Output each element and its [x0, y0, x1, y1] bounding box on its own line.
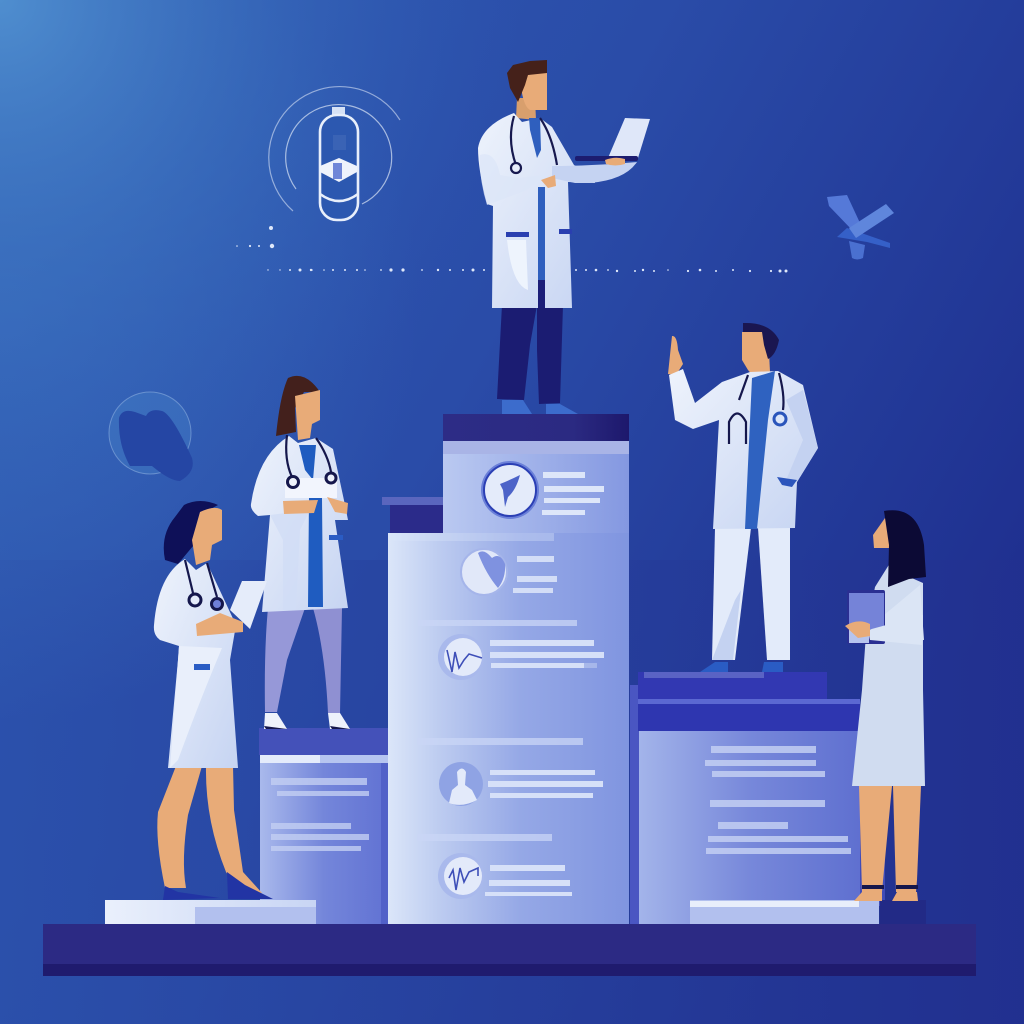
stethoscope: [286, 435, 336, 488]
ankle straps: [862, 885, 918, 889]
stethoscope: [729, 373, 786, 444]
figure: right woman with book: [845, 510, 926, 901]
dress: [852, 563, 925, 786]
figure: top doctor with laptop: [478, 60, 650, 414]
section rule 1: [418, 620, 577, 626]
hand: [845, 621, 870, 638]
text lines: row 3: [488, 770, 603, 798]
legs: [859, 786, 892, 892]
icon: oxygen cylinder: [269, 87, 400, 220]
face and neck: [192, 508, 222, 565]
section rule 3: [417, 834, 552, 841]
pockets: [506, 232, 529, 237]
laptop: [230, 581, 267, 629]
icon: heart badge: [461, 549, 507, 595]
step slab left: [105, 900, 316, 924]
right panel: [630, 672, 885, 924]
hair: [884, 510, 926, 587]
lab coat: [154, 559, 238, 768]
face and neck: [742, 332, 770, 378]
figure: left woman with clipboard: [251, 376, 350, 729]
icon: pulse badge 2: [438, 853, 484, 899]
feet: [854, 892, 918, 901]
sleeve: [868, 615, 923, 645]
shoes: [163, 872, 273, 900]
figure: right doctor waving: [668, 323, 818, 672]
clipboard: [285, 478, 337, 498]
section rule 2: [417, 738, 583, 745]
lab coat: [251, 436, 348, 612]
hair: [743, 323, 779, 359]
hand in pocket: [777, 477, 797, 487]
center tower main panel: [388, 533, 629, 924]
hands: [196, 613, 243, 636]
icon: badge with pointer: [481, 461, 539, 519]
icon: person badge: [439, 762, 483, 806]
stethoscope: [185, 560, 222, 610]
decorative dotted line: [236, 226, 787, 272]
figure: front-left woman with laptop: [154, 501, 273, 900]
text lines: right panel: [705, 746, 851, 854]
hands: [541, 158, 625, 188]
text lines: row 4: [485, 865, 572, 896]
hands: [283, 497, 348, 514]
hair: [276, 376, 320, 436]
trousers: [712, 528, 751, 660]
legs: [157, 766, 202, 888]
left panel: [259, 728, 388, 924]
shoes: [502, 400, 578, 414]
icon: speech bubble in circle: [109, 392, 193, 481]
neck and head: [516, 98, 536, 120]
shoes: [264, 713, 350, 729]
raised arm: [552, 162, 637, 183]
lab coat: [669, 369, 818, 529]
face and neck: [295, 390, 320, 440]
scrub stripe: [529, 118, 545, 308]
text lines: top block: [542, 472, 604, 515]
raised hand: [668, 336, 683, 375]
book: [847, 590, 885, 644]
text lines: left panel: [271, 778, 369, 851]
shoes: [700, 662, 783, 672]
scrub stripe: [745, 371, 775, 529]
step slab right: [690, 900, 926, 924]
icon: crossed tools: [827, 195, 894, 260]
hair: [507, 60, 547, 102]
text lines: row 2: [490, 640, 604, 668]
pocket: [194, 664, 210, 670]
center step: [382, 497, 444, 535]
center tower top block: [443, 414, 629, 541]
laptop: [608, 118, 650, 158]
lab coat: [478, 113, 595, 308]
base platform: [43, 924, 976, 976]
hair: [164, 501, 218, 564]
trousers: [497, 305, 537, 400]
legs: [265, 608, 305, 712]
scrub stripe: [299, 445, 323, 607]
face: [873, 518, 895, 562]
text lines: row 1: [513, 556, 557, 593]
stethoscope: [511, 116, 557, 173]
icon: pulse badge 1: [438, 634, 484, 680]
